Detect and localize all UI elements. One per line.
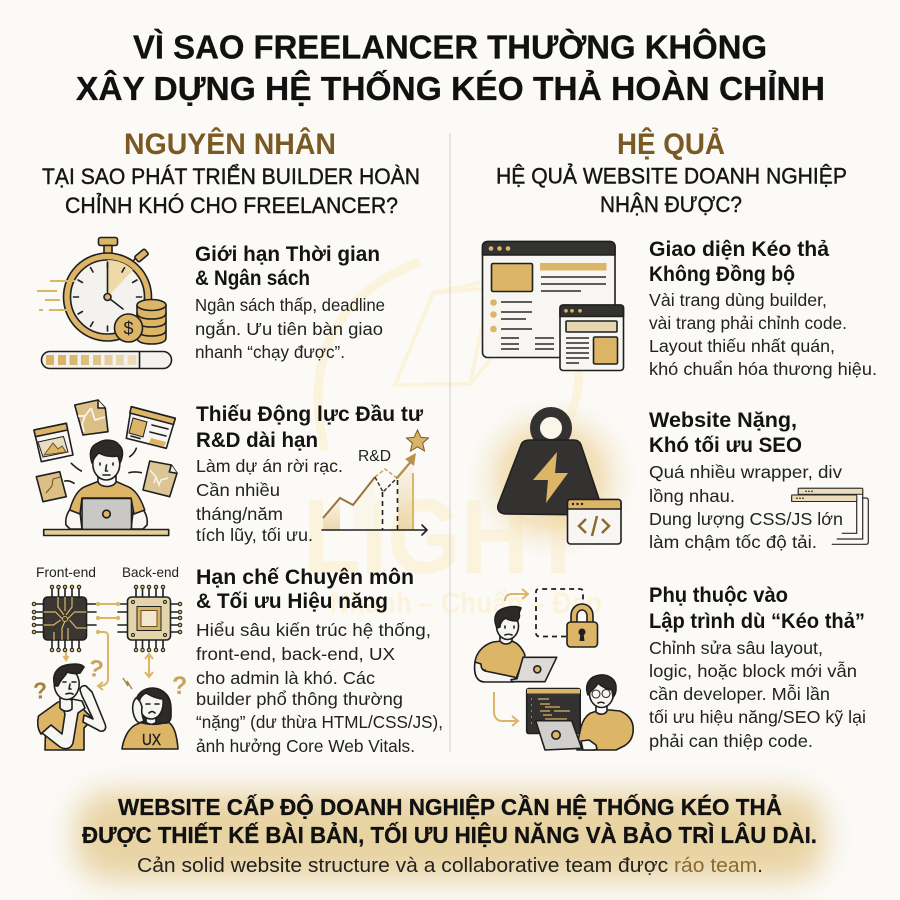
text block: limited expertise: ảnh hưởng Core Web Vitals. [196,736,415,756]
text block: time and budget [195,242,385,362]
text block: time and budget: ngắn. Ưu tiên bàn giao [195,318,383,339]
text block: limited expertise: front-end, back-end, UX [196,644,395,664]
callout: conclusion banner: ĐƯỢC THIẾT KẾ BÀI BẢN, TỐI ƯU HIỆU NĂNG VÀ BẢO TRÌ LÂU DÀI. [82,820,817,848]
text block: heavy website: Dung lượng CSS/JS lớn [649,509,843,529]
panel: effects heading: HỆ QUẢ [617,127,725,161]
panel: causes heading [42,127,420,218]
text block: limited expertise: & Tối ưu Hiệu năng [196,589,388,613]
text block: limited expertise: cho admin là khó. Các [196,668,375,688]
callout: conclusion banner [76,792,824,880]
text block: lack of motivation: Cần nhiều [196,480,280,500]
text block: lack of motivation: R&D dài hạn [196,428,318,452]
text block: dependent on programming: Phụ thuộc vào [649,583,788,607]
chart: R&D growth [322,430,428,535]
text block: time and budget: Giới hạn Thời gian [195,242,380,266]
panel: causes heading: TẠI SAO PHÁT TRIỂN BUILDER HOÀN [42,164,420,189]
text block: lack of motivation: tích lũy, tối ưu. [196,525,313,545]
watermark logo: LIGHT [303,478,587,596]
icon: heavy weight with code window [460,390,644,566]
icon: stopwatch with coins [37,238,172,368]
panel: effects heading [496,127,847,217]
icon: developers locked out of layout [475,589,633,750]
text block: heavy website: làm chậm tốc độ tải. [649,532,817,552]
icon: front-end, back-end chips and confused people: ? [32,677,48,704]
text block: heavy website [649,408,843,552]
text block: inconsistent UI: Layout thiếu nhất quán, [649,336,835,356]
text block: dependent on programming: cần developer. Mỗi lần [649,683,830,704]
icon: mismatched browser windows [482,242,624,370]
icon: front-end, back-end chips and confused people: ? [172,672,187,700]
text block: inconsistent UI: vài trang phải chỉnh code. [649,313,847,333]
text block: heavy website: Quá nhiều wrapper, div [649,462,842,482]
icon: front-end, back-end chips and confused people [32,564,187,750]
text block: dependent on programming: Chỉnh sửa sâu layout, [649,638,823,658]
text block: lack of motivation: Thiếu Động lực Đầu tư [196,402,423,426]
title: XÂY DỰNG HỆ THỐNG KÉO THẢ HOÀN CHỈNH [76,69,825,107]
title [76,28,825,107]
text block: limited expertise: Hạn chế Chuyên môn [196,565,414,589]
text block: time and budget: & Ngân sách [195,266,310,290]
text block: heavy website: Khó tối ưu SEO [649,433,802,457]
text block: inconsistent UI [649,237,877,379]
watermark logo [303,262,602,620]
text block: heavy website: Website Nặng, [649,408,797,432]
callout: conclusion banner: WEBSITE CẤP ĐỘ DOANH NGHIỆP CẦN HỆ THỐNG KÉO THẢ [118,792,782,820]
text block: dependent on programming: logic, hoặc block mới vẫn [649,660,857,681]
icon: front-end, back-end chips and confused people: Back-end [122,564,179,580]
callout: conclusion banner: Cản solid website structure và a collaborative team được ráo team. [137,855,763,877]
text block: inconsistent UI: Không Đồng bộ [649,262,795,286]
text block: inconsistent UI: Giao diện Kéo thả [649,237,830,261]
icon: stopwatch with coins: $ [123,318,134,338]
text block: lack of motivation: tháng/năm [196,504,283,524]
icon: front-end, back-end chips and confused people: ? [86,654,106,684]
panel: causes heading: CHỈNH KHÓ CHO FREELANCER? [65,193,398,218]
text block: time and budget: Ngân sách thấp, deadline [195,295,385,315]
chart: R&D growth: R&D [358,448,391,465]
icon: front-end, back-end chips and confused people: Front-end [36,564,96,580]
icon: freelancer with scattered projects [34,400,177,536]
text block: lack of motivation: Làm dự án rời rạc. [196,456,343,476]
icon: front-end, back-end chips and confused people: UX [142,732,162,749]
text block: time and budget: nhanh “chạy được”. [195,342,345,362]
text block: heavy website: lồng nhau. [649,486,735,506]
text block: limited expertise [196,565,443,756]
watermark logo: Nhanh – Chuẩn – Đẹp [330,587,602,620]
panel: effects heading: NHẬN ĐƯỢC? [600,192,742,217]
panel: effects heading: HỆ QUẢ WEBSITE DOANH NGHIỆP [496,164,847,188]
text block: dependent on programming [649,583,866,751]
text block: limited expertise: builder phổ thông thường [196,689,403,709]
text block: inconsistent UI: Vài trang dùng builder, [649,290,827,310]
panel: causes heading: NGUYÊN NHÂN [124,127,336,161]
title: VÌ SAO FREELANCER THƯỜNG KHÔNG [133,28,767,66]
text block: limited expertise: “nặng” (dư thừa HTML/CSS/JS), [196,712,443,732]
text block: dependent on programming: tối ưu hiệu năng/SEO kỹ lại [649,707,866,727]
text block: dependent on programming: Lập trình dù “Kéo thả” [649,609,865,633]
text block: inconsistent UI: khó chuẩn hóa thương hiệu. [649,359,877,379]
text block: limited expertise: Hiểu sâu kiến trúc hệ thống, [196,620,431,640]
text block: dependent on programming: phải can thiệp code. [649,731,813,751]
text block: lack of motivation [196,402,423,545]
icon: stacked wrapper windows [792,488,868,544]
